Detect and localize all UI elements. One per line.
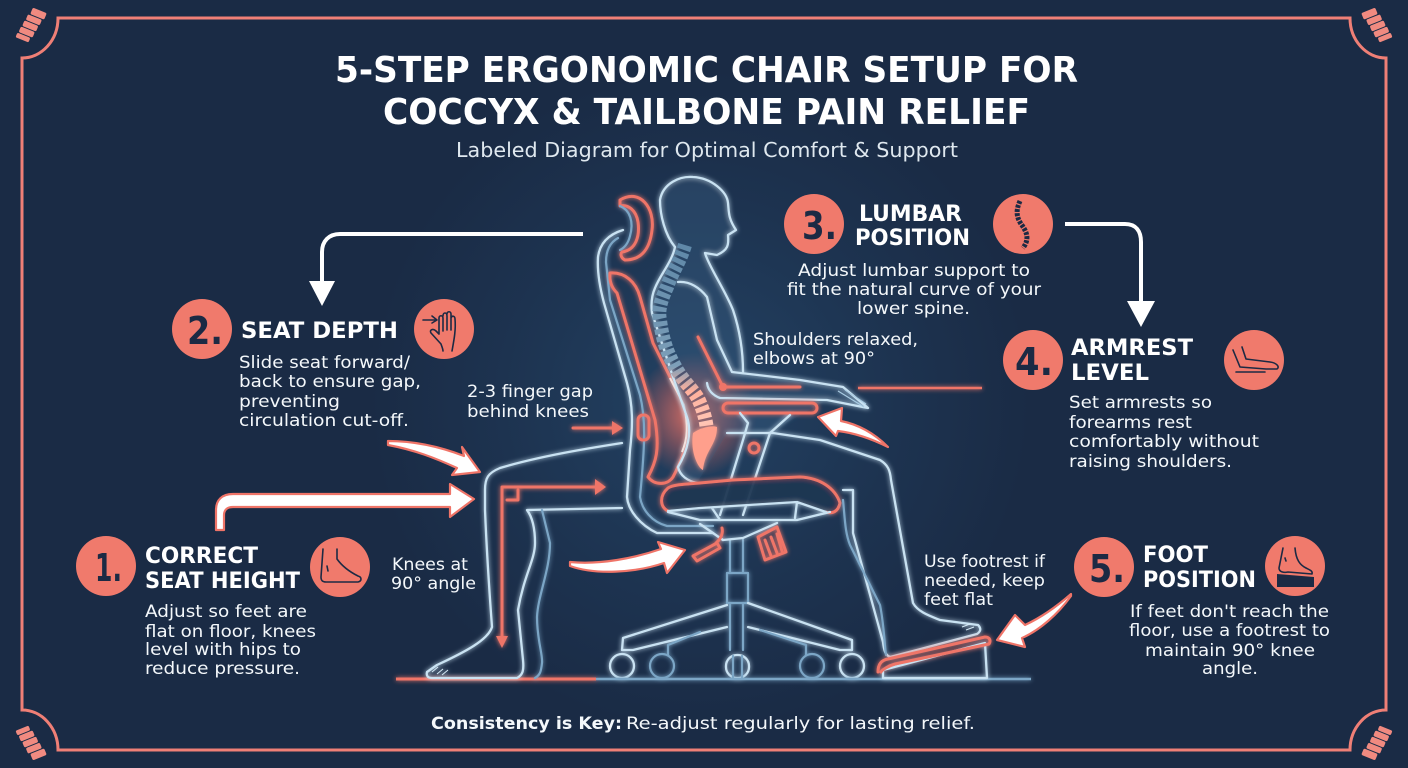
knee gap arrow: [573, 421, 623, 435]
number badge 1: 1.: [95, 546, 122, 590]
diagram: seated figure and chair: [396, 177, 1031, 679]
heading 3: LUMBAR: [859, 202, 962, 227]
body text 2: circulation cut-off.: [239, 411, 409, 431]
body text 5: maintain 90° knee: [1145, 641, 1315, 661]
heading 3: [855, 202, 970, 251]
spine: [659, 245, 717, 470]
callout: footrest: feet flat: [924, 590, 993, 610]
heading 4: LEVEL: [1071, 361, 1149, 386]
icon: foot on wedge: [1265, 536, 1325, 596]
footrest: [878, 637, 990, 678]
heading 2: SEAT DEPTH: [241, 319, 398, 344]
callout: finger gap: 2-3 finger gap: [467, 382, 593, 402]
icon: foot: [310, 537, 370, 597]
panel: step 5 foot position: [1074, 536, 1330, 679]
armrest and support post: [720, 403, 817, 515]
elbow angle marker: [698, 337, 800, 391]
body text 3: Adjust lumbar support to: [798, 261, 1030, 281]
footer note: [431, 714, 975, 734]
icon: corner vertebrae bottom right: [1361, 723, 1393, 762]
callout: footrest: Use footrest if: [924, 552, 1046, 572]
callout: footrest: needed, keep: [924, 571, 1045, 591]
body text 1: level with hips to: [145, 640, 301, 660]
arrow: armrest: [818, 408, 888, 447]
panel: step 2 seat depth: [172, 299, 474, 431]
arrow: seat adjust lever: [570, 542, 685, 573]
number badge 4: 4.: [1015, 340, 1053, 384]
knee angle marker: [496, 479, 606, 648]
lumbar glow: [633, 345, 757, 485]
chair base and column: [610, 540, 864, 678]
heading 4: ARMREST: [1071, 336, 1193, 361]
icon: forearm: [1224, 330, 1284, 390]
body text 4: forearms rest: [1069, 413, 1192, 433]
number badge 5: [1074, 537, 1134, 597]
body text 4: raising shoulders.: [1069, 452, 1232, 472]
thigh and near leg: [427, 443, 622, 678]
arrow: step 3 to step 4: [1065, 224, 1155, 327]
title: [335, 50, 1078, 133]
number badge 1: [76, 536, 136, 596]
far leg and foot on footrest: [727, 433, 980, 657]
icon: corner vertebrae top left: [15, 6, 47, 45]
heading 3: POSITION: [855, 226, 970, 251]
body text 1: reduce pressure.: [145, 659, 300, 679]
number badge 5: 5.: [1089, 547, 1125, 591]
chair back frame and headrest: [598, 196, 713, 533]
body text 5: [1129, 602, 1330, 679]
callout: knees: Knees at: [392, 555, 468, 575]
callout: knees: 90° angle: [391, 574, 476, 594]
footer note: Consistency is Key:: [431, 714, 622, 734]
body text 4: comfortably without: [1069, 432, 1259, 452]
body text 5: angle.: [1202, 659, 1258, 679]
number badge 3: [784, 194, 844, 254]
heading 5: [1143, 543, 1256, 593]
body text 5: If feet don't reach the: [1130, 602, 1329, 622]
seat cushion and mechanism: [662, 477, 840, 561]
body text 2: [239, 353, 421, 431]
callout: shoulders: [753, 330, 918, 369]
arrow: seat depth to knee: [388, 441, 480, 475]
body text 1: Adjust so feet are: [145, 602, 307, 622]
icon: spine: [993, 194, 1053, 254]
torso, head and arm: [651, 177, 868, 483]
title: COCCYX & TAILBONE PAIN RELIEF: [383, 92, 1030, 133]
heading 5: FOOT: [1143, 543, 1208, 568]
arrow: footrest: [997, 594, 1071, 647]
body text 1: [145, 602, 316, 679]
number badge 3: 3.: [802, 204, 837, 248]
arrow: step 2 pointer: [309, 234, 583, 306]
body text 5: floor, use a footrest to: [1129, 621, 1330, 641]
title: 5-STEP ERGONOMIC CHAIR SETUP FOR: [335, 50, 1078, 91]
body text 4: [1069, 393, 1259, 472]
callout: footrest: [924, 552, 1046, 610]
heading 1: CORRECT: [145, 544, 258, 569]
footer note: Re-adjust regularly for lasting relief.: [626, 714, 975, 734]
subtitle: Labeled Diagram for Optimal Comfort & Support: [456, 138, 958, 162]
callout: knees: [391, 555, 476, 594]
body text 3: fit the natural curve of your: [787, 280, 1041, 300]
panel: step 4 armrest level: [1003, 330, 1284, 472]
callout: finger gap: behind knees: [467, 402, 589, 422]
armrest level line: [858, 387, 982, 389]
body text 2: back to ensure gap,: [239, 372, 421, 392]
number badge 2: [172, 299, 232, 359]
body text 2: preventing: [239, 392, 340, 412]
icon: corner vertebrae bottom left: [15, 723, 47, 762]
callout: shoulders: Shoulders relaxed,: [753, 330, 918, 350]
body text 1: flat on floor, knees: [145, 622, 316, 642]
heading 4: [1071, 336, 1193, 386]
body text 3: lower spine.: [857, 299, 970, 319]
body text 2: Slide seat forward/: [239, 353, 410, 373]
callout: finger gap: [467, 382, 593, 422]
heading 1: [145, 544, 300, 594]
body text 3: [787, 261, 1041, 319]
floor line: [396, 678, 1031, 680]
heading 5: POSITION: [1143, 568, 1256, 593]
heading 1: SEAT HEIGHT: [145, 569, 300, 594]
icon: corner vertebrae top right: [1361, 6, 1393, 45]
body text 4: Set armrests so: [1069, 393, 1212, 413]
number badge 4: [1003, 330, 1063, 390]
panel: step 1 correct seat height: [76, 536, 370, 679]
panel: step 3 lumbar position: [784, 194, 1053, 319]
callout: shoulders: elbows at 90°: [753, 349, 875, 369]
arrow: seat height to knee: [216, 484, 474, 530]
icon: hand: [414, 299, 474, 359]
number badge 2: 2.: [187, 309, 223, 353]
